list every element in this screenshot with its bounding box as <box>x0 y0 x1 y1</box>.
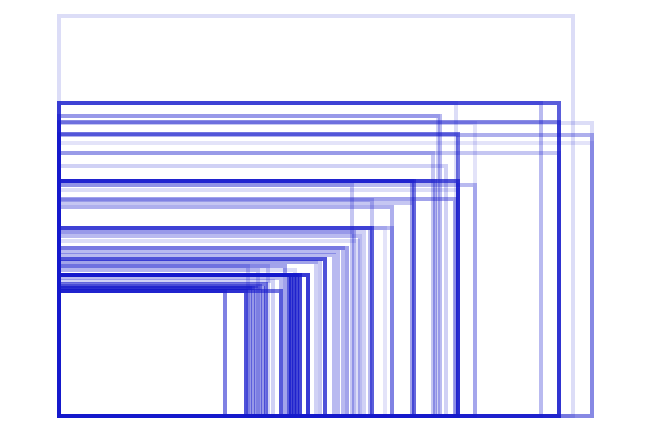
medium rectangles <box>59 185 458 416</box>
small rectangles <box>59 259 325 416</box>
large rectangles <box>59 16 592 416</box>
